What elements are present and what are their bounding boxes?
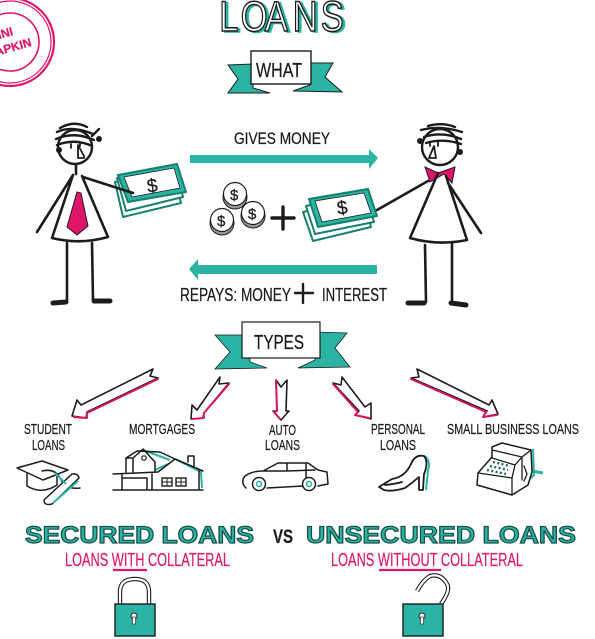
arrow: to student loans (72, 369, 158, 418)
cash: left stack (115, 164, 186, 217)
cash: left stack: $ (146, 175, 159, 198)
label: student loans: LOANS (32, 437, 65, 454)
head and hat (56, 124, 102, 164)
arrow: to auto loans (273, 380, 289, 420)
cash: middle stack: $ (336, 197, 349, 220)
banner: types: TYPES (254, 332, 304, 354)
heading: unsecured loans: UNSECURED LOANS (306, 522, 576, 549)
label: repays money plus interest: INTEREST (322, 285, 387, 305)
label: auto loans: LOANS (265, 437, 300, 454)
icon: high heel (379, 456, 429, 491)
label: mortgages: MORTGAGES (129, 421, 195, 438)
icon: coins: $ (217, 213, 226, 230)
subheading: loans without collateral: LOANS WITHOUT COLLATERAL (331, 550, 523, 570)
label: auto loans: AUTO (269, 422, 296, 439)
head and hat (417, 124, 463, 165)
stamp: mini napkin (0, 0, 54, 86)
body and limbs (377, 173, 481, 302)
figure: lender with tie (37, 124, 133, 303)
icon: house (113, 449, 203, 490)
icon: cash register (477, 443, 543, 495)
icon: closed lock (115, 579, 155, 636)
body and limbs (37, 165, 133, 302)
label: auto loans (265, 422, 300, 454)
banner: what: WHAT (256, 60, 302, 82)
subheading: loans with collateral: LOANS WITH COLLATERAL (65, 550, 230, 570)
label: personal loans: PERSONAL (371, 421, 425, 438)
icon: car (243, 463, 328, 490)
arrow: repays (189, 259, 377, 280)
cash: middle stack (303, 189, 377, 241)
arrow: gives money (190, 149, 378, 169)
icon: coins (210, 182, 265, 235)
icon: plus sign (272, 207, 294, 229)
heading: secured loans: SECURED LOANS (25, 522, 254, 549)
label: personal loans (371, 421, 425, 454)
bow tie (425, 167, 455, 183)
icon: graduation cap and diploma (17, 461, 80, 504)
arrow: to small business loans (411, 369, 498, 417)
label: gives money: GIVES MONEY (234, 129, 330, 148)
arrow: to personal loans (333, 377, 371, 419)
label: vs: VS (273, 527, 293, 548)
tie (67, 192, 88, 235)
icon: open lock (403, 575, 448, 636)
banner: types (215, 322, 350, 369)
arrow: to mortgages (191, 377, 229, 419)
icon: coins: $ (248, 206, 257, 223)
label: personal loans: LOANS (380, 437, 416, 454)
label: repays money plus interest: REPAYS: MONEY (180, 285, 291, 305)
banner: what (228, 51, 342, 93)
icon: coins: $ (230, 187, 239, 204)
figure: borrower with bow tie (377, 124, 481, 305)
label: student loans (24, 421, 72, 454)
label: student loans: STUDENT (24, 421, 72, 438)
label: repays money plus interest (180, 284, 387, 305)
